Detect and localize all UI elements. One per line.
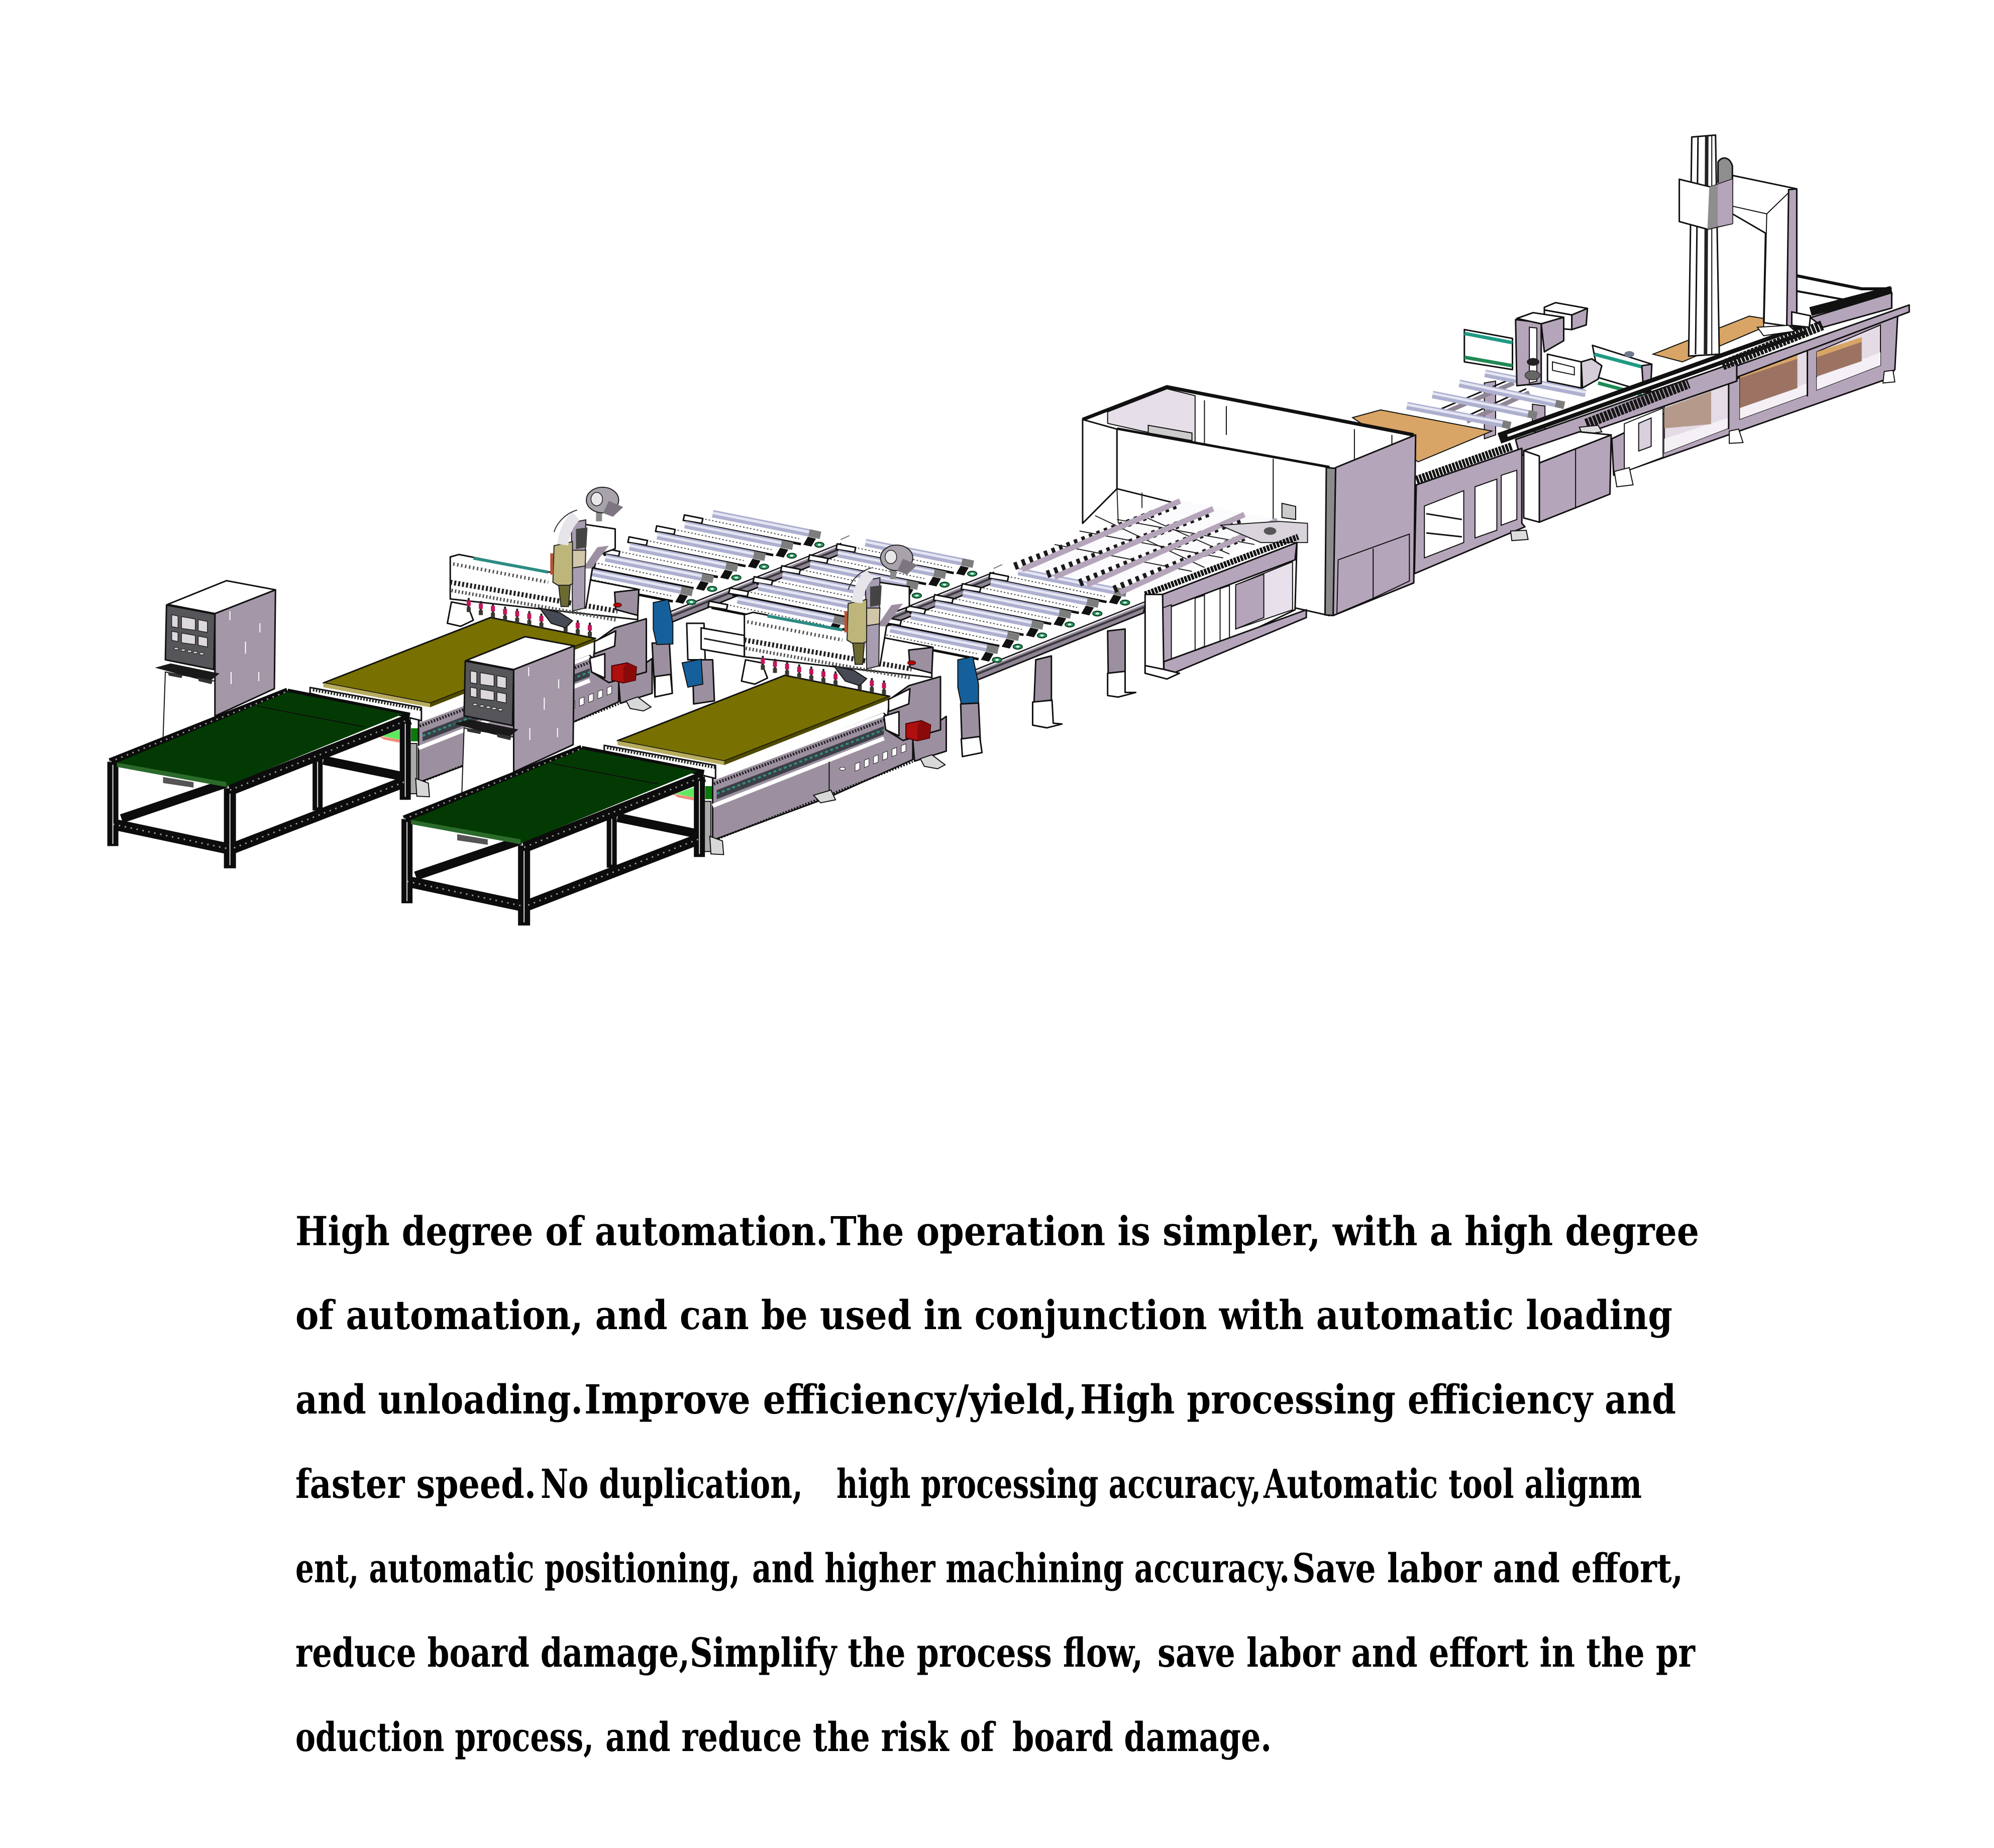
icon: blue motors bbox=[653, 600, 982, 756]
line 7: board damage. bbox=[1012, 1713, 1272, 1761]
control cabinet one bbox=[155, 581, 275, 739]
line 5 bbox=[295, 1545, 1683, 1592]
infeed rollers bbox=[1407, 372, 1592, 439]
control cabinet two bbox=[454, 636, 574, 795]
machinery illustration bbox=[110, 135, 1909, 925]
line 1: High degree of automation. bbox=[295, 1208, 828, 1255]
line 1: The operation is simpler, with a high degree bbox=[830, 1208, 1699, 1255]
line 3: Improve efficiency/yield, bbox=[584, 1376, 1077, 1423]
roller conveyor section one bbox=[555, 513, 850, 623]
line 7 bbox=[295, 1713, 1272, 1761]
line 4: high processing accuracy, bbox=[836, 1460, 1261, 1507]
line 4: faster speed. bbox=[295, 1460, 536, 1507]
enclosure bbox=[1083, 387, 1416, 616]
support legs behind conveyor bbox=[652, 623, 745, 704]
line 5: ent, automatic positioning, bbox=[295, 1545, 740, 1592]
line 6: Simplify the process flow, bbox=[690, 1629, 1143, 1676]
stacked boards bbox=[1664, 337, 1862, 428]
line 4: No duplication, bbox=[541, 1460, 803, 1507]
panel: infeed machining stations bbox=[110, 487, 1155, 925]
line 5: and higher machining accuracy. bbox=[752, 1545, 1290, 1592]
line 5: Save labor and effort, bbox=[1292, 1545, 1683, 1592]
conveyor base frame bbox=[1032, 537, 1306, 728]
carriage block bbox=[1680, 179, 1732, 229]
line 7: oduction process, bbox=[295, 1713, 594, 1761]
gantry arch bbox=[1732, 175, 1797, 328]
line 6 bbox=[295, 1629, 1696, 1676]
line 7: and reduce the risk of bbox=[605, 1713, 996, 1761]
feeder head bbox=[1464, 303, 1652, 394]
line 6: save labor and effort in the pr bbox=[1158, 1629, 1696, 1676]
line 2: of automation, and can be used in conjunction with automatic loading bbox=[295, 1291, 1672, 1339]
loading table two bbox=[404, 748, 704, 925]
line 4: Automatic tool alignm bbox=[1263, 1460, 1642, 1507]
line 3 bbox=[295, 1376, 1676, 1423]
machining station two bbox=[604, 545, 946, 854]
panel: enclosure, feeder and gantry stacker bbox=[1009, 135, 1909, 728]
line 1 bbox=[295, 1208, 1699, 1255]
long transfer rail bbox=[1499, 290, 1909, 456]
line 3: and unloading. bbox=[295, 1376, 583, 1423]
roller conveyor section three bbox=[861, 571, 1155, 681]
side electrical cabinet bbox=[1524, 432, 1611, 522]
wood board one bbox=[1352, 410, 1492, 462]
roller conveyor section two bbox=[708, 541, 1002, 651]
middle frame bbox=[1414, 446, 1528, 574]
conveyor table bbox=[1009, 489, 1308, 593]
wood board two bbox=[1653, 316, 1763, 362]
far frame bbox=[1612, 275, 1898, 487]
line 4 bbox=[295, 1460, 1642, 1507]
text block: product description bbox=[295, 1208, 1699, 1761]
vertical pillar bbox=[1680, 135, 1732, 356]
machining station one bbox=[310, 487, 652, 797]
line 6: reduce board damage, bbox=[295, 1629, 690, 1676]
line 3: High processing efficiency and bbox=[1080, 1376, 1676, 1423]
loading table one bbox=[110, 691, 410, 868]
